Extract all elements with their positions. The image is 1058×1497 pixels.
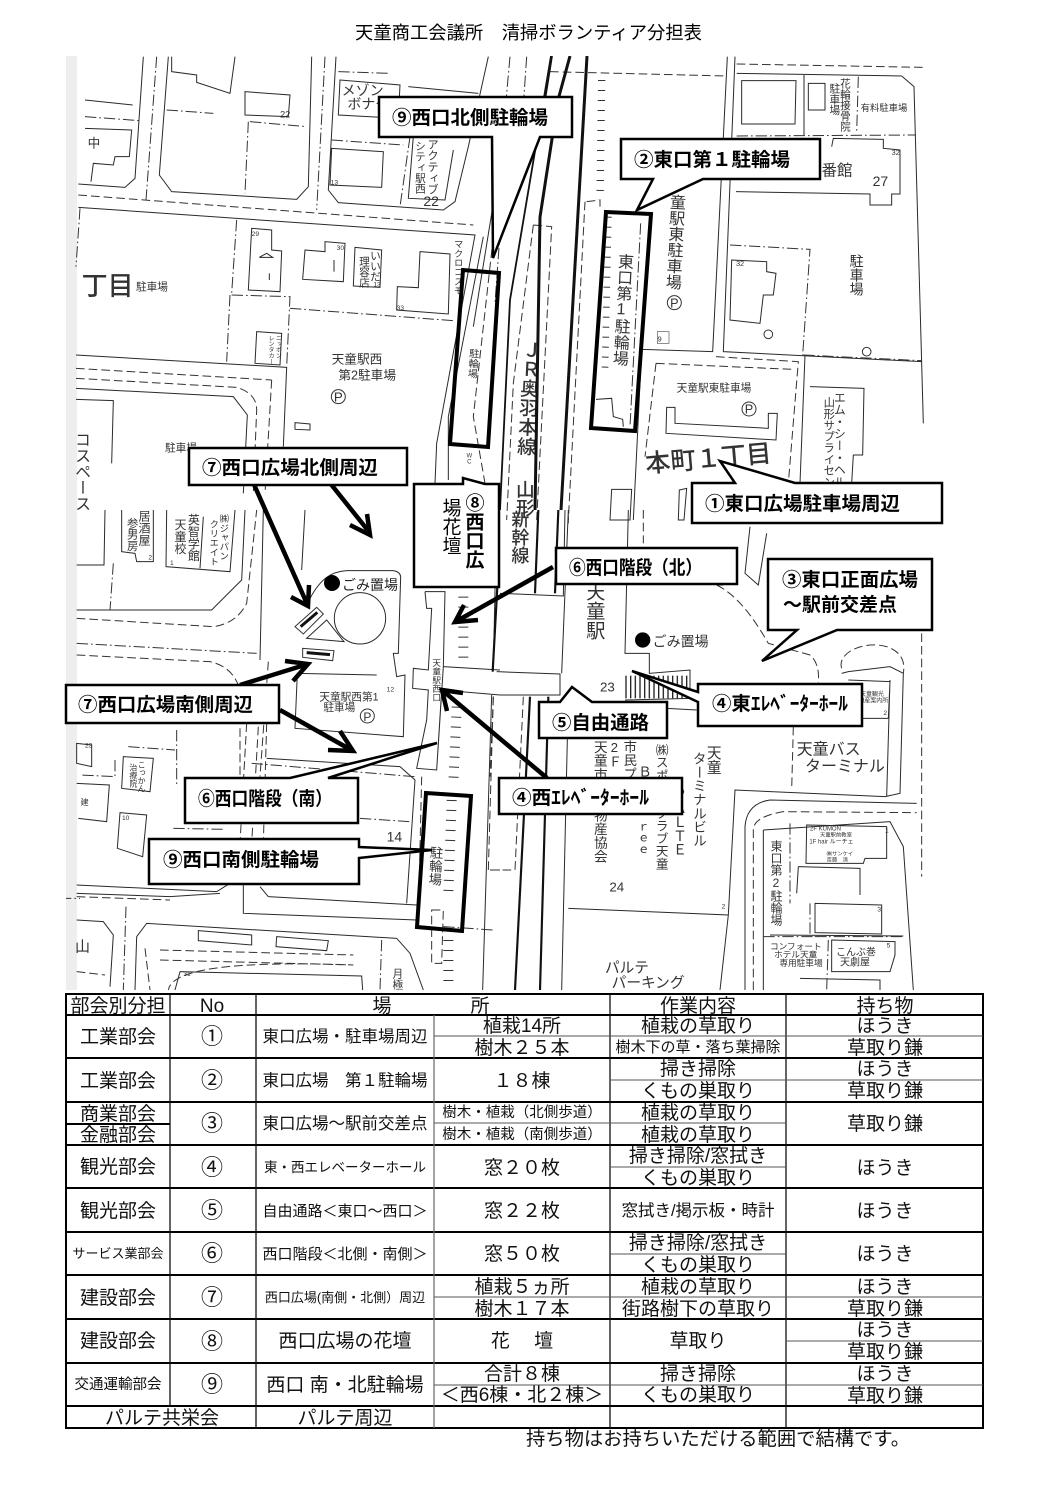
highlight: west south bicycle parking: [417, 793, 471, 931]
row 10: パルテ周辺: [297, 1407, 393, 1429]
map: southwest quadrant: 駐車場: [323, 701, 356, 714]
map: northeast quadrant: P: [745, 403, 753, 417]
map: southeast quadrant: こんぶ巻: [836, 946, 876, 958]
map: southeast quadrant: ターミナルビル: [691, 752, 706, 847]
row 9: ＜西6棟・北２棟＞: [441, 1384, 603, 1406]
row 3: 東口広場～駅前交差点: [262, 1114, 428, 1133]
row 5: 観光部会: [80, 1200, 156, 1222]
callout: 4 east elevator hall: [632, 671, 862, 726]
map: southwest quadrant: 天童駅西口: [432, 658, 442, 702]
map: southeast quadrant: 23: [600, 680, 615, 695]
row 2: １８棟: [493, 1070, 551, 1092]
map: southwest quadrant: ㈱ジャパン: [218, 513, 229, 561]
map: northwest quadrant: レンタカー: [267, 335, 274, 365]
table: cleaning volunteer assignments: [66, 994, 983, 1429]
map: southeast quadrant: 2Ｆ: [607, 740, 622, 768]
map: southeast quadrant: 天童: [705, 745, 721, 775]
row 2: [80, 1058, 923, 1102]
map: southeast quadrant: 1: [885, 828, 889, 835]
map: northeast quadrant: 本町１丁目: [644, 440, 773, 479]
map: northwest quadrant: 駐輪場: [465, 347, 479, 379]
row 2: くもの巣取り: [641, 1080, 755, 1102]
map: northwest quadrant: ボナー: [347, 96, 389, 112]
map: northwest quadrant: 第2駐車場: [338, 367, 396, 382]
map: southwest quadrant: 天童駅西第1: [319, 691, 379, 704]
callout: 9 west north bicycle parking: [379, 97, 572, 258]
map: northwest quadrant: 駐車場: [165, 442, 197, 455]
map: southeast quadrant: 2: [883, 710, 887, 717]
row 9: ⑨: [201, 1372, 223, 1397]
callout: 9 west south bicycle parking: [149, 839, 432, 884]
row 7: ほうき: [856, 1277, 914, 1298]
row 8: 草取り鎌: [847, 1341, 923, 1363]
map: southwest quadrant: 23: [85, 742, 93, 749]
map: northeast quadrant: 32: [736, 259, 744, 268]
row 4: [80, 1145, 914, 1189]
map: northwest quadrant: 13: [373, 282, 381, 289]
row 9: 草取り鎌: [847, 1385, 923, 1407]
map: northwest quadrant: 13: [331, 180, 338, 187]
row 3: 植栽の草取り: [641, 1124, 755, 1146]
map: northeast quadrant: 東口第1駐輪場: [610, 253, 634, 368]
map: northeast quadrant: 32: [892, 148, 900, 157]
map: northeast quadrant: 27: [873, 173, 888, 189]
row 3: 樹木・植栽（北側歩道）: [442, 1104, 602, 1121]
map: southeast quadrant: 専用駐車場: [779, 957, 823, 968]
icon: garbage point west: ごみ置場: [342, 577, 398, 593]
map: southeast quadrant: 2: [722, 903, 726, 910]
map: northwest quadrant: 丁目: [82, 271, 134, 301]
map: southwest quadrant: 建: [81, 797, 89, 807]
map: southeast quadrant: 天劇屋: [840, 955, 870, 968]
row 5: ⑤: [201, 1198, 223, 1223]
callout: 4 east elevator hall: ④東ｴﾚﾍﾞｰﾀｰﾎｰﾙ: [712, 693, 848, 715]
map: southwest quadrant: 10: [122, 815, 130, 822]
map: northeast quadrant: エム・シー・ヘル: [832, 391, 846, 487]
map: northwest quadrant: 天童駅西: [332, 352, 382, 366]
arrow: 7 south to parking: [280, 710, 353, 751]
table header: [70, 995, 914, 1017]
callout: 7 west plaza south: [66, 685, 279, 723]
row 1: 東口広場・駐車場周辺: [262, 1027, 428, 1046]
row 3: 草取り鎌: [847, 1113, 923, 1135]
callout: 3 east front plaza: ③東口正面広場: [782, 569, 918, 591]
map: southwest quadrant: 天童校: [173, 518, 187, 555]
callout: 7 west plaza north: ⑦西口広場北側周辺: [202, 457, 378, 479]
map: northwest quadrant: メゾン: [342, 83, 384, 99]
row 9: くもの巣取り: [641, 1384, 755, 1406]
row 6: 西口階段＜北側・南側＞: [262, 1246, 428, 1263]
row 4: 東・西エレベーターホール: [264, 1160, 426, 1175]
map: southeast quadrant: Ｂ: [636, 765, 651, 778]
map: southeast quadrant: ＰＡＬＴＥ: [672, 787, 688, 857]
map: southwest quadrant: 参男房: [126, 517, 138, 552]
map: northwest quadrant: W: [467, 453, 473, 459]
map: southeast quadrant: 天童観光: [860, 690, 884, 698]
map: southwest quadrant: 14: [387, 829, 402, 845]
map: southwest quadrant: 月極: [391, 968, 403, 990]
map: southwest quadrant: [60, 510, 500, 990]
row 1: 樹木下の草・落ち葉掃除: [615, 1038, 781, 1056]
map: southeast quadrant: ㈱スポーツクラブ天童: [654, 743, 668, 870]
callout: 1 east plaza parking: ①東口広場駐車場周辺: [705, 493, 900, 515]
map: southeast quadrant: ｒｅｅ: [637, 822, 649, 856]
map: southwest quadrant: 治療院: [129, 762, 138, 788]
map: southeast quadrant: ごみ置場: [653, 634, 709, 650]
icon: garbage point west: [324, 575, 398, 593]
row 10: [105, 1407, 393, 1429]
map: southwest quadrant: クリエイト: [208, 519, 219, 566]
arrow: 7 south to plaza: [240, 661, 308, 685]
railway tracks: [500, 56, 587, 510]
callout: 2 east first bicycle parking: ②東口第１駐輪場: [634, 149, 790, 171]
map: northwest quadrant: ニッポン: [274, 335, 281, 359]
map: southeast quadrant: 東口第2駐輪場: [769, 840, 783, 926]
row 2: ②: [201, 1068, 223, 1093]
table header: 持ち物: [856, 995, 914, 1017]
callout: 9 west south bicycle parking: ⑨西口南側駐輪場: [163, 849, 319, 871]
map: northwest quadrant: いいだ: [369, 250, 381, 282]
callout: 8 west plaza flowerbed: ⑧西口広: [462, 493, 484, 569]
map: northwest quadrant: C: [467, 459, 472, 465]
footnote: 持ち物はお持ちいただける範囲で結構です。: [526, 1428, 910, 1450]
map: northwest quadrant: 22: [280, 110, 290, 120]
row 7: [80, 1276, 923, 1320]
row 8: ⑧: [201, 1329, 223, 1354]
map: southeast quadrant: 2F KUMON: [810, 827, 841, 833]
row 4: 窓２０枚: [484, 1157, 560, 1179]
map: northeast quadrant: 番館: [822, 163, 852, 180]
callout: 7 west plaza north: [189, 448, 407, 485]
arrow: 6 north stairs: [455, 567, 553, 622]
table header: 部会別分担: [70, 995, 166, 1017]
row 9: [74, 1363, 923, 1407]
callout: 4 west elevator hall: ④西ｴﾚﾍﾞｰﾀｰﾎｰﾙ: [512, 787, 649, 809]
row 2: 草取り鎌: [847, 1080, 923, 1102]
row 8: [80, 1320, 923, 1363]
arrow: 7 north to corner: [330, 483, 370, 535]
row 8: ほうき: [856, 1320, 914, 1341]
row 1: 植栽の草取り: [641, 1015, 755, 1037]
row 7: ⑦: [201, 1285, 223, 1310]
map: southwest quadrant: こっかん: [137, 761, 146, 793]
row 5: 窓２２枚: [484, 1200, 560, 1222]
map: northwest quadrant: シティ駅西: [414, 141, 426, 194]
row 4: ④: [201, 1155, 223, 1180]
callout: 1 east plaza parking: [692, 461, 942, 523]
row 7: 草取り鎌: [847, 1298, 923, 1320]
map: southeast quadrant: 天童バス: [797, 740, 861, 758]
row 5: ほうき: [856, 1201, 914, 1222]
map: northeast quadrant: P: [670, 296, 679, 310]
table header: No: [200, 996, 224, 1017]
map: southwest quadrant: 山: [75, 939, 90, 956]
table header: 作業内容: [660, 995, 736, 1017]
map: southeast quadrant: 1F hair ルーチェ: [809, 838, 854, 845]
map: southeast quadrant: 新幹線: [509, 510, 529, 564]
row 4: 観光部会: [80, 1156, 156, 1178]
row 7: 街路樹下の草取り: [622, 1298, 774, 1320]
row 7: 植栽５ヵ所: [474, 1276, 570, 1298]
row 3: 商業部会: [80, 1103, 156, 1125]
map: northwest quadrant: マクロコスモ: [453, 239, 463, 295]
row 3: 金融部会: [80, 1124, 156, 1146]
row 1: 草取り鎌: [847, 1037, 923, 1059]
map: northwest quadrant: 22: [423, 193, 439, 209]
row 3: 樹木・植栽（南側歩道）: [442, 1126, 602, 1143]
callout: 5 free passage: ⑤自由通路: [552, 712, 649, 734]
map: northwest quadrant: 30: [337, 245, 344, 252]
map: southeast quadrant: 天童駅前教室: [820, 831, 853, 839]
row 9: 合計８棟: [484, 1363, 560, 1385]
map: southwest quadrant: 駐輪場: [426, 845, 444, 887]
row 1: ①: [201, 1024, 223, 1049]
arrow: 7 north to plaza: [252, 480, 309, 606]
row 8: 西口広場の花壇: [278, 1330, 412, 1352]
map: northeast quadrant: 駐車場: [828, 83, 840, 116]
row 3: [80, 1102, 923, 1146]
row 9: 交通運輸部会: [74, 1376, 162, 1393]
callout: 4 west elevator hall: [499, 778, 682, 814]
row 7: 植栽の草取り: [641, 1276, 755, 1298]
map: southeast quadrant: 物産案内所: [858, 697, 888, 705]
icon: garbage point east: [635, 632, 650, 648]
map: northwest quadrant: P: [334, 389, 343, 404]
row 6: ほうき: [856, 1244, 914, 1265]
map: northwest quadrant: 33: [397, 305, 404, 312]
map: southeast quadrant: ホテル天童: [774, 949, 818, 960]
callout: 8 west plaza flowerbed: 場花壇: [440, 498, 461, 555]
map: southeast quadrant: 斎藤 清: [827, 856, 849, 864]
map: northwest quadrant: 中: [88, 136, 100, 150]
row 2: 工業部会: [80, 1070, 156, 1092]
table header: 場: [372, 995, 392, 1017]
map: southeast quadrant: 天童市観光物産協会: [592, 740, 608, 863]
table grid: [66, 994, 983, 1428]
callout: 8 west plaza flowerbed: [414, 478, 499, 587]
row 9: 掃き掃除: [660, 1363, 736, 1385]
map: southwest quadrant: 31: [183, 971, 191, 978]
row 6: 窓５０枚: [484, 1243, 560, 1265]
map: southwest quadrant: 居酒屋: [137, 510, 151, 547]
row 4: ほうき: [856, 1158, 914, 1179]
row 4: くもの巣取り: [641, 1167, 755, 1189]
map: northwest quadrant: [72, 57, 493, 512]
row 9: 西口 南・北駐輪場: [266, 1374, 424, 1396]
row 7: 西口広場(南側・北側）周辺: [265, 1290, 425, 1305]
map: northeast quadrant: 童駅東駐車場: [662, 194, 686, 291]
map: southeast quadrant: 3: [877, 907, 881, 914]
map: southeast quadrant: パーキング: [612, 975, 685, 992]
row 10: パルテ共栄会: [105, 1407, 219, 1429]
panel: station area map: [60, 56, 923, 992]
row 6: サービス業部会: [72, 1246, 164, 1261]
row 7: 樹木１７本: [474, 1298, 570, 1320]
row 8: 花 壇: [491, 1330, 553, 1352]
callout: 3 east front plaza: ～駅前交差点: [783, 594, 897, 616]
map: northeast quadrant: 山形サプライセン: [822, 397, 835, 487]
row 5: [80, 1198, 914, 1223]
arrow: 4 west elevator hall: [442, 690, 547, 778]
row 1: ほうき: [856, 1016, 914, 1037]
map: southeast quadrant: 24: [609, 880, 625, 895]
map: northeast quadrant: 山形: [514, 480, 535, 517]
callout: 2 east first bicycle parking: [621, 139, 820, 210]
row 8: 建設部会: [80, 1330, 156, 1352]
callout: 3 east front plaza: [762, 559, 932, 661]
row 6: 掃き掃除/窓拭き: [629, 1232, 767, 1254]
table header: 所: [470, 995, 490, 1017]
title: 天童商工会議所 清掃ボランティア分担表: [355, 23, 702, 43]
map: northeast quadrant: 花輪接骨院: [839, 78, 851, 132]
row 6: くもの巣取り: [641, 1254, 755, 1276]
callout: 7 west plaza south: ⑦西口広場南側周辺: [78, 694, 253, 716]
map: northeast quadrant: 駐車場: [849, 254, 865, 296]
row 1: 植栽14所: [483, 1015, 561, 1037]
map: northeast quadrant: 9: [658, 335, 662, 344]
row 9: ほうき: [856, 1364, 914, 1385]
row 1: 工業部会: [80, 1026, 156, 1048]
row 3: ③: [201, 1111, 223, 1136]
map: northwest quadrant: コスペース: [72, 432, 90, 512]
map: southeast quadrant: [490, 510, 922, 992]
row 3: 植栽の草取り: [641, 1102, 755, 1124]
map: southwest quadrant: 英智学館: [186, 513, 200, 561]
callout: 6 west stairs north: [556, 548, 737, 584]
callout: 6 west stairs south: ⑥西口階段（南）: [198, 788, 332, 810]
map: southeast quadrant: パルテ: [605, 960, 649, 977]
row 4: 掃き掃除/窓拭き: [629, 1145, 767, 1167]
map: southeast quadrant: 天童駅: [583, 582, 605, 640]
map: northeast quadrant: [495, 57, 923, 520]
callout: 9 west north bicycle parking: ⑨西口北側駐輪場: [392, 107, 548, 129]
callout: 6 west stairs south: [185, 743, 437, 823]
map: southeast quadrant: 5: [887, 942, 891, 949]
map: southeast quadrant: ㈱サンケイ: [827, 849, 853, 857]
row 1: 樹木２５本: [474, 1037, 570, 1059]
map: southwest quadrant: 12: [387, 687, 394, 694]
row 8: 草取り: [669, 1330, 727, 1352]
row 2: 東口広場 第１駐輪場: [262, 1071, 428, 1090]
map: northwest quadrant: アクティブ: [426, 138, 438, 195]
row 6: [72, 1232, 914, 1276]
map: southwest quadrant: 1: [170, 560, 174, 567]
map: southwest quadrant: P: [363, 710, 371, 724]
highlight: east first bicycle parking: [591, 212, 651, 431]
map: northeast quadrant: ＪＲ奥羽本線: [513, 339, 542, 456]
row 6: ⑥: [201, 1241, 223, 1266]
map: southeast quadrant: ターミナル: [805, 758, 885, 776]
map: northeast quadrant: 天童駅東駐車場: [677, 381, 752, 394]
row 7: 建設部会: [80, 1287, 156, 1309]
row 2: ほうき: [856, 1059, 914, 1080]
map: northwest quadrant: 駐車場: [136, 281, 168, 294]
map: northeast quadrant: 有料駐車場: [861, 102, 907, 113]
map: southeast quadrant: コンフォート: [770, 941, 822, 951]
map: southwest quadrant: 2: [148, 554, 152, 561]
callout: 6 west stairs north: ⑥西口階段（北）: [569, 557, 702, 579]
map: southeast quadrant: 市民プラザ: [622, 740, 637, 807]
row 5: 窓拭き/掲示板・時計: [621, 1201, 775, 1220]
row 2: 掃き掃除: [660, 1058, 736, 1080]
row 1: [80, 1015, 923, 1059]
row 5: 自由通路＜東口～西口＞: [262, 1203, 428, 1220]
callout: 5 free passage: [539, 687, 667, 738]
highlight: west north bicycle parking: [450, 270, 499, 447]
map: northwest quadrant: 29: [252, 231, 259, 238]
map: northwest quadrant: 理容店: [358, 256, 370, 289]
